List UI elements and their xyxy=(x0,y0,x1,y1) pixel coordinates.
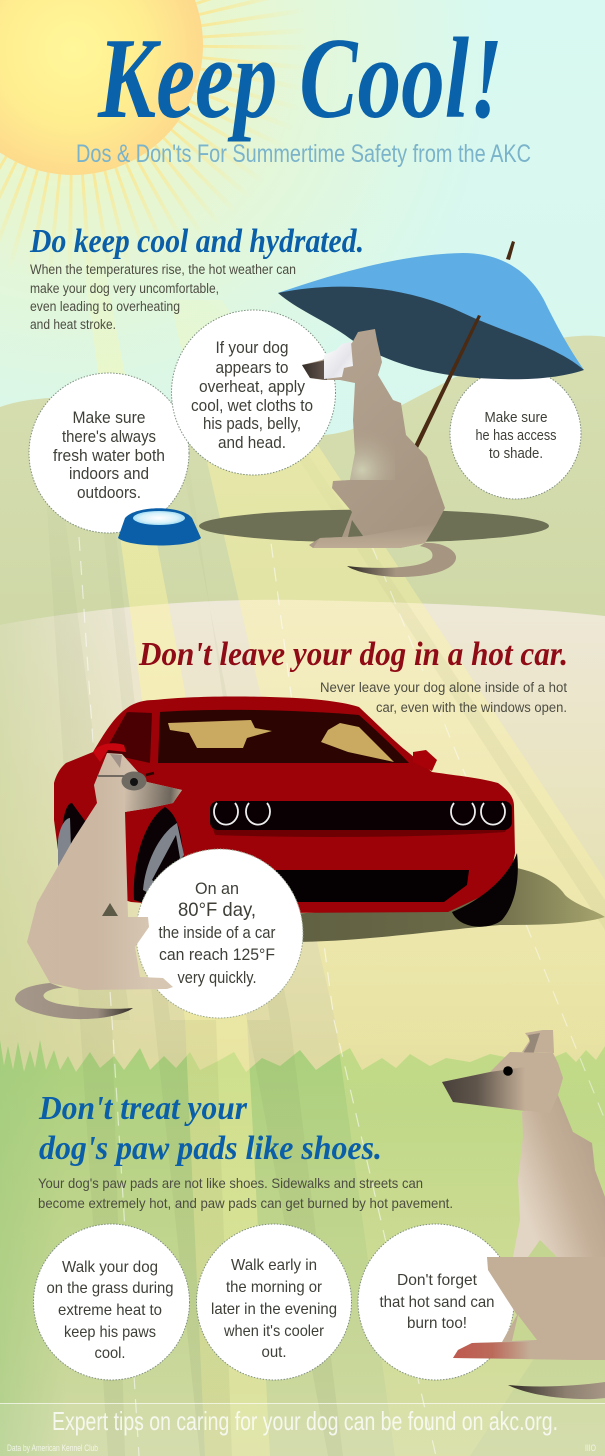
illustration: dog with burned paw xyxy=(442,1030,605,1399)
callout: walk early or late: the morning or xyxy=(226,1279,323,1296)
intro text: paw pads: become extremely hot, and paw pads can get burned by hot pavement. xyxy=(38,1195,453,1211)
car shadow xyxy=(270,868,605,942)
callout: wet cloths: overheat, apply xyxy=(199,378,306,396)
footer band xyxy=(0,1403,605,1456)
dog snout xyxy=(302,360,327,380)
callout: wet cloths: his pads, belly, xyxy=(203,415,301,433)
front wheel xyxy=(134,807,184,905)
callout: fresh water: indoors and xyxy=(69,465,149,483)
callout: wet cloths: cool, wet cloths to xyxy=(191,397,313,415)
panel: keep cool and hydrated xyxy=(29,223,584,577)
icon: umbrella xyxy=(278,241,584,448)
data credit: Data by American Kennel Club xyxy=(7,1443,98,1453)
publisher mark: IIIO xyxy=(585,1443,596,1453)
panel: hot car xyxy=(15,636,605,1019)
callout: walk on grass: cool. xyxy=(94,1345,126,1362)
dog leg gap xyxy=(512,1315,537,1341)
callout: walk on grass: keep his paws xyxy=(64,1324,156,1341)
illustration: red car xyxy=(54,696,518,927)
callout: walk early or late: later in the evening xyxy=(211,1301,337,1318)
intro text: paw pads: Your dog's paw pads are not like shoes. Sidewalks and streets can xyxy=(38,1175,423,1191)
headlights xyxy=(214,803,505,825)
sun xyxy=(0,0,203,175)
rear wheel xyxy=(62,803,88,880)
callout: hot sand xyxy=(358,1224,514,1380)
shadow under dog xyxy=(199,510,549,542)
dog leg gap xyxy=(348,520,363,537)
dog ear flash xyxy=(93,743,126,762)
sun rays xyxy=(0,0,256,228)
intro text: never leave dog xyxy=(320,680,567,715)
burned paw xyxy=(453,1342,537,1359)
heading: hot car: Don't leave your dog in a hot car. xyxy=(138,636,568,673)
dog tail xyxy=(15,983,133,1019)
icon: water bowl xyxy=(118,508,201,546)
callout: hot sand: Don't forget xyxy=(397,1272,478,1289)
callout: wet cloths xyxy=(172,310,336,475)
background sun glow xyxy=(0,0,605,560)
callout: walk on grass: Walk your dog xyxy=(62,1259,158,1276)
intro text: hot weather: make your dog very uncomfortable, xyxy=(30,281,219,296)
dog belly xyxy=(313,523,437,548)
callout: hot sand: that hot sand can xyxy=(380,1294,494,1311)
callout: fresh water: fresh water both xyxy=(53,447,165,465)
heading: paw pads xyxy=(38,1090,382,1167)
intro text: paw pads xyxy=(38,1175,453,1211)
grass field xyxy=(0,1040,605,1456)
callout: walk early or late: out. xyxy=(262,1344,286,1361)
dog neck and chest xyxy=(513,1095,605,1257)
callout: inside of car temperature xyxy=(136,849,303,1018)
callout: walk early or late xyxy=(196,1224,352,1380)
dog muzzle xyxy=(442,1067,525,1111)
callout: walk early or late: Walk early in xyxy=(231,1257,317,1274)
heading: keep cool: Do keep cool and hydrated. xyxy=(29,223,364,260)
illustration: dog with sunglasses xyxy=(15,743,182,1019)
callout: walk on grass: extreme heat to xyxy=(58,1302,162,1319)
panel: paw pads xyxy=(34,1030,605,1399)
dog chest highlight xyxy=(350,430,395,480)
callout: walk on grass xyxy=(34,1224,190,1380)
callout: fresh water: Make sure xyxy=(72,409,146,427)
callout: fresh water: outdoors. xyxy=(77,484,141,502)
callout: inside of car temperature: On an xyxy=(195,879,239,898)
callout: walk on grass: on the grass during xyxy=(46,1280,174,1297)
dog leg gap xyxy=(102,903,118,916)
intro text: hot weather: When the temperatures rise, the hot weather can xyxy=(30,262,296,277)
intro text: hot weather xyxy=(30,262,296,332)
callout: inside of car temperature: very quickly. xyxy=(178,968,256,987)
callout: wet cloths: appears to xyxy=(216,359,288,377)
dog tail xyxy=(508,1382,605,1399)
dog ear xyxy=(522,1030,554,1053)
sunglasses xyxy=(98,772,154,790)
callout: inside of car temperature: the inside of a car xyxy=(158,923,276,942)
dog head xyxy=(442,1052,563,1113)
dog haunch xyxy=(453,1257,605,1360)
callout: wet cloths: and head. xyxy=(218,434,286,452)
intro text: never leave dog: Never leave your dog alone inside of a hot xyxy=(320,680,567,695)
callout: fresh water xyxy=(29,373,189,533)
dog muzzle xyxy=(125,778,182,812)
callout: inside of car temperature: 80°F day, xyxy=(178,899,256,921)
callout: shade: he has access xyxy=(476,428,556,444)
callout: wet cloths: If your dog xyxy=(216,339,288,357)
callout: hot sand: burn too! xyxy=(407,1315,467,1332)
callout: walk early or late: when it's cooler xyxy=(223,1323,325,1340)
callout: fresh water: there's always xyxy=(62,428,156,446)
background hills xyxy=(0,336,605,700)
background sand xyxy=(0,600,605,1100)
right wheel xyxy=(452,853,518,927)
heading: paw pads: dog's paw pads like shoes. xyxy=(39,1130,382,1167)
dog neck gap xyxy=(528,1240,557,1257)
callout: shade xyxy=(450,368,581,499)
dog inner ear xyxy=(110,754,122,768)
intro text: hot weather: and heat stroke. xyxy=(30,317,116,332)
callout: inside of car temperature: can reach 125°F xyxy=(159,945,275,964)
illustration: dog with cloth xyxy=(302,329,456,577)
intro text: never leave dog: car, even with the windows open. xyxy=(376,700,567,715)
intro text: hot weather: even leading to overheating xyxy=(30,299,180,314)
dog tail xyxy=(347,543,456,577)
cold cloth xyxy=(324,342,353,379)
dog eye xyxy=(503,1066,513,1076)
callout: shade: to shade. xyxy=(489,446,543,462)
callout: shade: Make sure xyxy=(484,410,548,426)
heading: paw pads: Don't treat your xyxy=(38,1090,248,1127)
